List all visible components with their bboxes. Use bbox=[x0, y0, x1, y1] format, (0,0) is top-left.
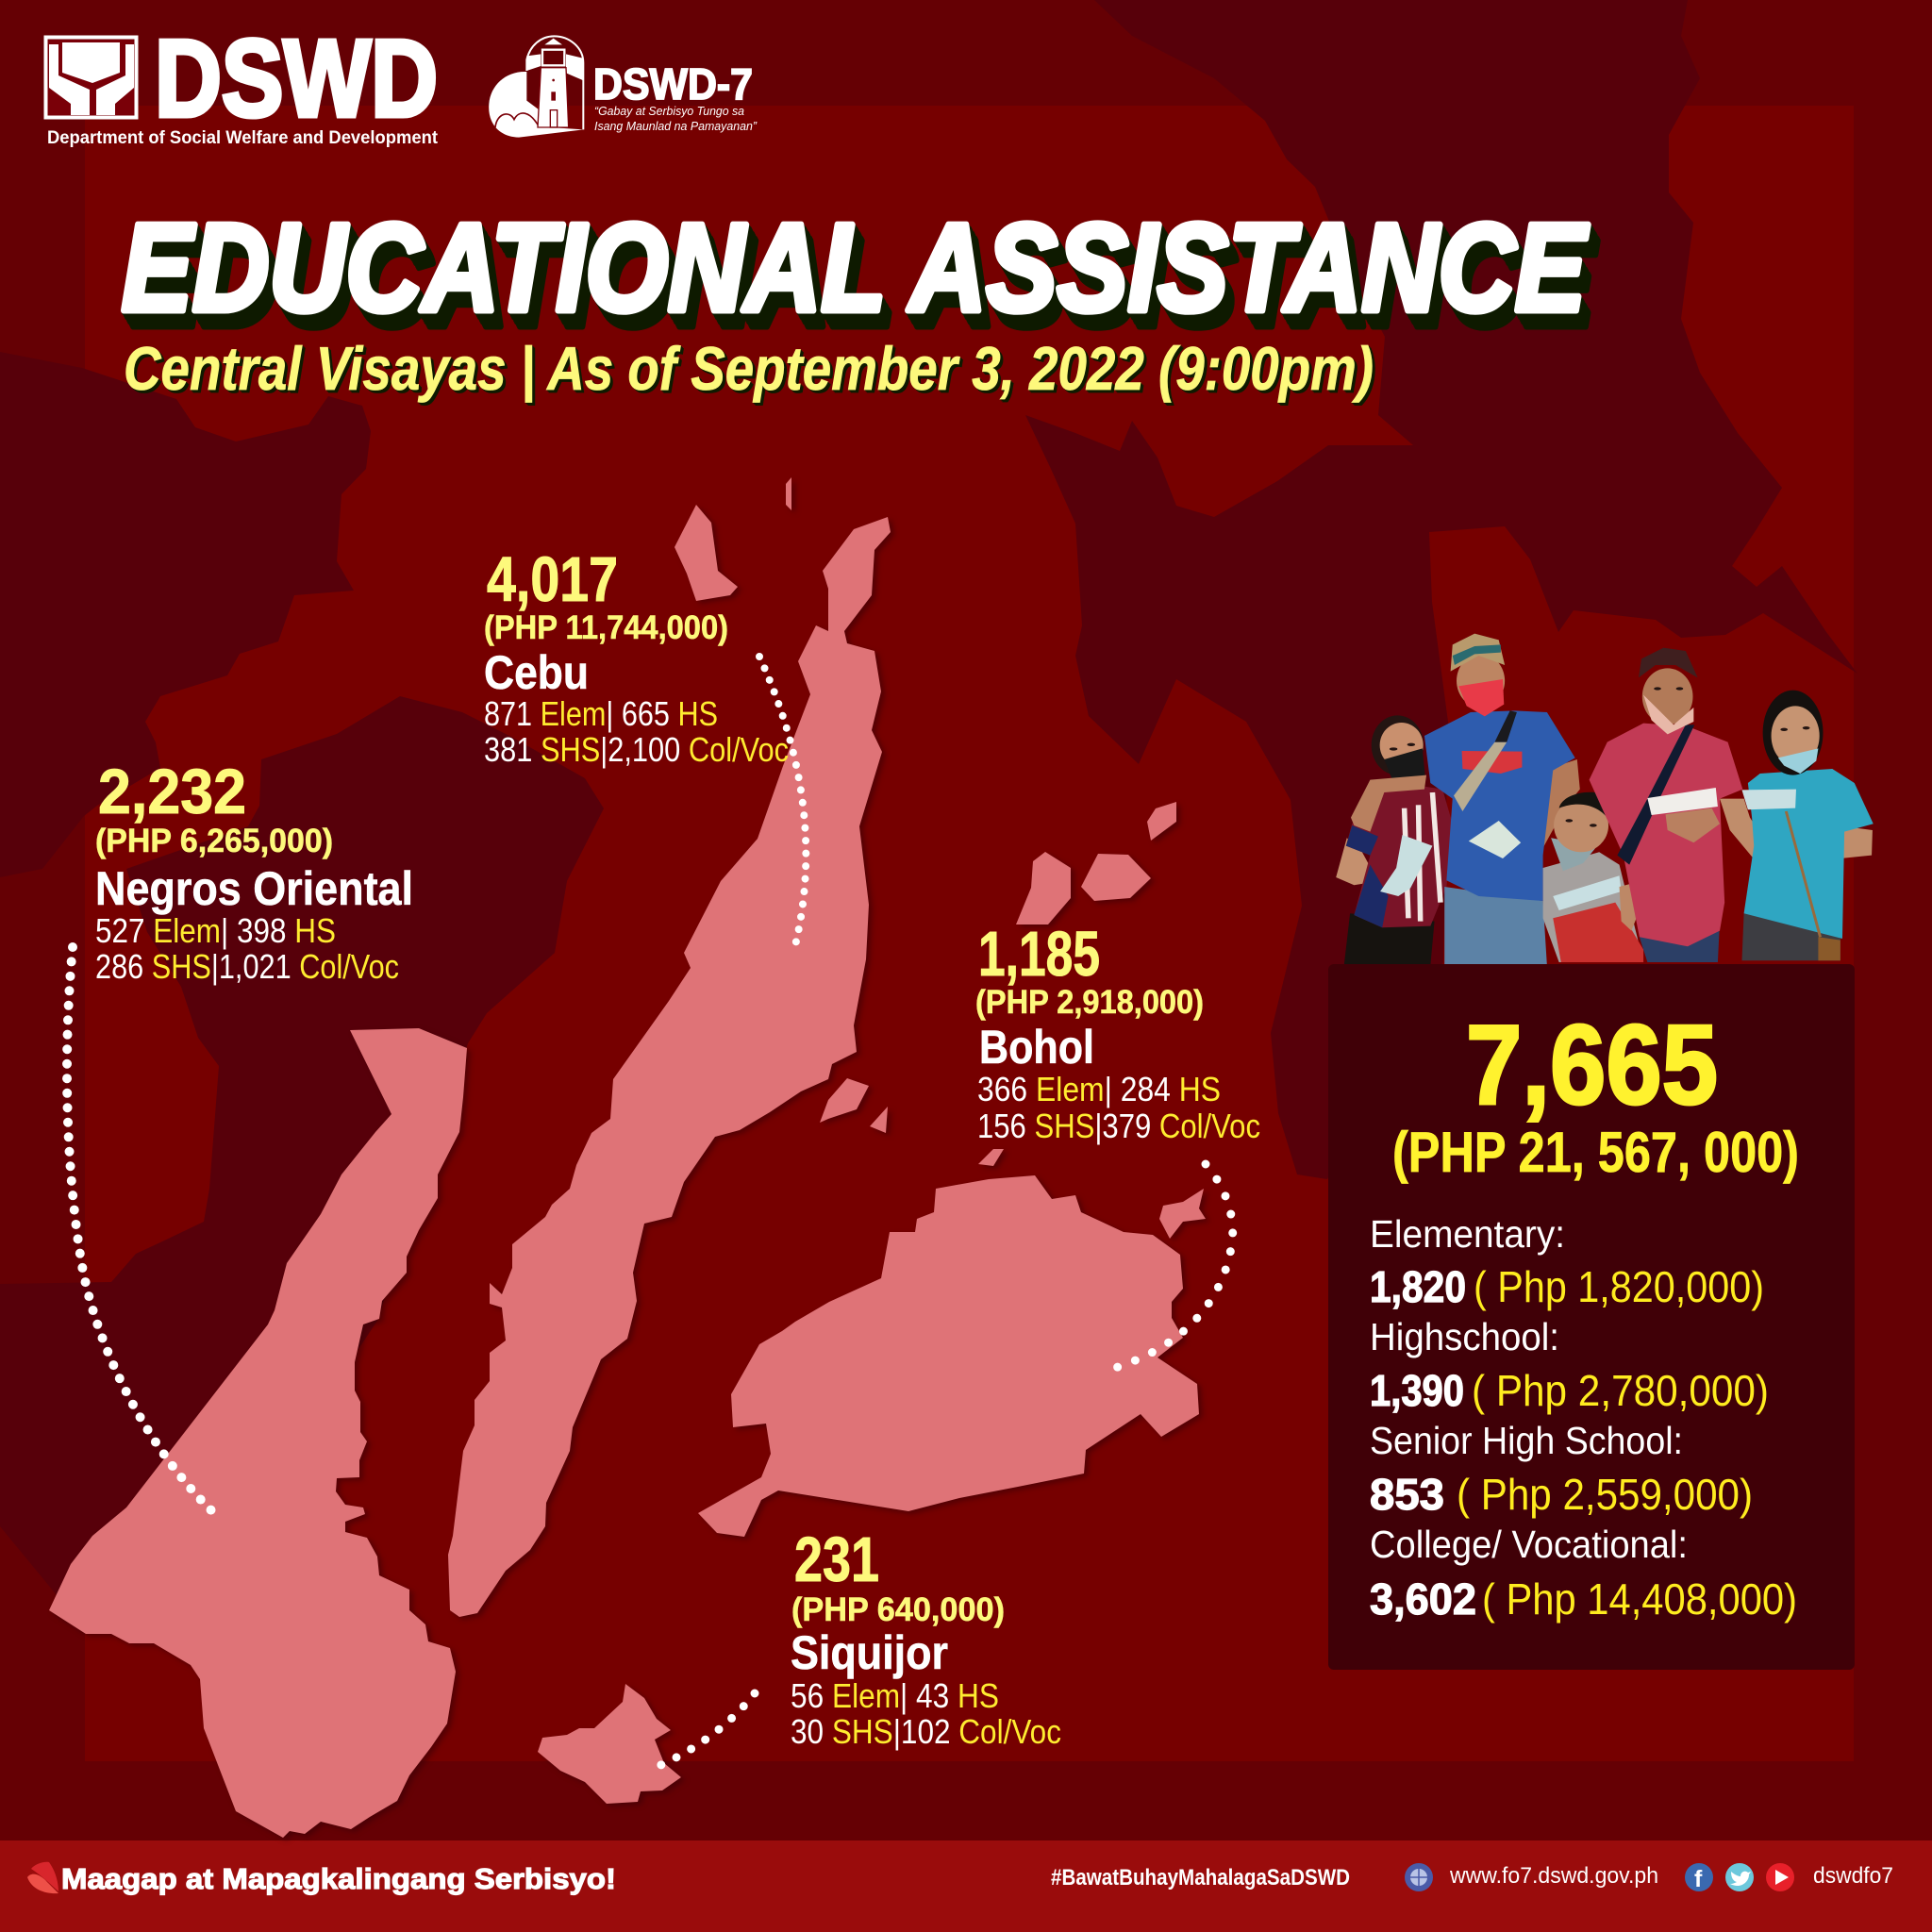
breakdown: highschool: ( Php 2,780,000) bbox=[1472, 1366, 1769, 1415]
label: Bohol: Bohol bbox=[979, 1021, 1094, 1074]
footer website: www.fo7.dswd.gov.ph bbox=[1449, 1863, 1658, 1889]
label: Bohol: 1,185 bbox=[978, 919, 1100, 990]
icon: facebook: f bbox=[1694, 1866, 1703, 1892]
subtitle: Central Visayas | As of September 3, 2022 (9:00pm) bbox=[124, 334, 1374, 403]
breakdown: senior high school bbox=[1370, 1419, 1753, 1519]
label: Negros Oriental: 286 SHS|1,021 Col/Voc bbox=[95, 947, 399, 986]
label: Siquijor: 56 Elem| 43 HS bbox=[791, 1676, 999, 1715]
breakdown: college vocational: ( Php 14,408,000) bbox=[1482, 1574, 1797, 1624]
person: man in pink shirt bbox=[1590, 648, 1742, 962]
island: Bantayan bbox=[675, 505, 738, 601]
person: girl in cyan shirt bbox=[1720, 691, 1874, 960]
island: Negros bbox=[49, 1028, 467, 1838]
label: Bohol: 366 Elem| 284 HS bbox=[977, 1070, 1221, 1108]
dotted leader: Cebu bbox=[759, 657, 806, 953]
person: man in blue shirt bbox=[1351, 634, 1580, 965]
island: Olango bbox=[820, 1078, 869, 1123]
label: Bohol: (PHP 2,918,000) bbox=[975, 984, 1204, 1021]
logo: DSWD-7 lighthouse bbox=[489, 36, 758, 138]
label: Siquijor bbox=[791, 1524, 1061, 1751]
label: Siquijor: (PHP 640,000) bbox=[791, 1591, 1005, 1628]
icon: footer leaf bbox=[27, 1862, 58, 1893]
label: Negros Oriental: Negros Oriental bbox=[95, 862, 413, 915]
total beneficiaries: 7,665 bbox=[1466, 1002, 1718, 1128]
person: boy bbox=[1543, 792, 1643, 962]
breakdown: elementary: Elementary: bbox=[1370, 1212, 1565, 1256]
island: small islet bbox=[870, 1107, 888, 1133]
logo: DSWD: DSWD bbox=[155, 17, 438, 140]
label: Cebu: Cebu bbox=[484, 646, 589, 699]
label: Cebu bbox=[484, 544, 789, 769]
icon: globe bbox=[1405, 1863, 1433, 1891]
dotted leader: Siquijor bbox=[657, 1693, 755, 1767]
title: EDUCATIONAL ASSISTANCE bbox=[122, 198, 1589, 337]
dotted leader: Negros Oriental bbox=[67, 947, 214, 1513]
label: Cebu: 4,017 bbox=[487, 544, 618, 615]
icon: lighthouse bbox=[489, 36, 583, 138]
logo: DSWD-7 lighthouse: Isang Maunlad na Pamayanan” bbox=[594, 119, 758, 133]
breakdown: highschool: 1,390 bbox=[1370, 1366, 1464, 1415]
island: Bohol bbox=[698, 1175, 1199, 1537]
breakdown: senior high school: ( Php 2,559,000) bbox=[1457, 1470, 1753, 1519]
breakdown: senior high school: 853 bbox=[1370, 1470, 1444, 1519]
breakdown: highschool: Highschool: bbox=[1370, 1315, 1559, 1358]
person: woman in striped shirt bbox=[1336, 715, 1453, 965]
breakdown: college vocational: 3,602 bbox=[1370, 1574, 1476, 1624]
island: Siquijor bbox=[538, 1684, 681, 1804]
label: Negros Oriental bbox=[95, 757, 413, 986]
logo: DSWD-7 lighthouse: DSWD-7 bbox=[593, 59, 753, 108]
island: Bohol north-east islet bbox=[1159, 1189, 1206, 1239]
map: Central Visayas islands bbox=[49, 477, 1206, 1838]
logo: DSWD-7 lighthouse: “Gabay at Serbisyo Tungo sa bbox=[594, 104, 744, 118]
icon: youtube bbox=[1766, 1863, 1794, 1891]
label: Bohol bbox=[975, 919, 1260, 1145]
island: Camotes west bbox=[1016, 852, 1071, 924]
breakdown: elementary: ( Php 1,820,000) bbox=[1474, 1262, 1764, 1311]
label: Cebu: 871 Elem| 665 HS bbox=[484, 694, 718, 733]
breakdown: elementary: 1,820 bbox=[1370, 1262, 1466, 1311]
footer hashtag: #BawatBuhayMahalagaSaDSWD bbox=[1051, 1865, 1350, 1890]
label: Cebu: 381 SHS|2,100 Col/Voc bbox=[484, 730, 789, 769]
panel: totals bbox=[1328, 964, 1855, 1670]
label: Siquijor: Siquijor bbox=[791, 1626, 948, 1679]
breakdown: college vocational: College/ Vocational: bbox=[1370, 1523, 1688, 1566]
label: Negros Oriental: (PHP 6,265,000) bbox=[95, 823, 333, 859]
breakdown: elementary bbox=[1370, 1212, 1764, 1311]
label: Bohol: 156 SHS|379 Col/Voc bbox=[977, 1107, 1260, 1145]
footer slogan: Maagap at Mapagkalingang Serbisyo! bbox=[61, 1862, 616, 1895]
island: Bohol north islet bbox=[978, 1149, 1004, 1166]
island: Cebu bbox=[448, 517, 891, 1617]
label: Cebu: (PHP 11,744,000) bbox=[484, 609, 728, 646]
label: Negros Oriental: 2,232 bbox=[98, 757, 246, 827]
icon: twitter bbox=[1725, 1863, 1754, 1891]
breakdown: highschool bbox=[1370, 1315, 1769, 1415]
total amount: (PHP 21, 567, 000) bbox=[1392, 1121, 1799, 1184]
icon: facebook bbox=[1685, 1863, 1713, 1892]
label: Negros Oriental: 527 Elem| 398 HS bbox=[95, 911, 336, 950]
label: Siquijor: 30 SHS|102 Col/Voc bbox=[791, 1712, 1061, 1751]
dotted leader: Bohol bbox=[1115, 1164, 1233, 1368]
island: Camotes east bbox=[1081, 854, 1151, 901]
logo: DSWD: Department of Social Welfare and Development bbox=[47, 128, 439, 148]
breakdown: senior high school: Senior High School: bbox=[1370, 1419, 1683, 1462]
photo: beneficiary family bbox=[1336, 634, 1874, 965]
breakdown: college vocational bbox=[1370, 1523, 1797, 1624]
island: Camotes north bbox=[1147, 802, 1176, 841]
footer handle: dswdfo7 bbox=[1813, 1863, 1893, 1889]
logo: DSWD bbox=[45, 17, 439, 148]
island: tiny north islet bbox=[786, 477, 791, 510]
label: Siquijor: 231 bbox=[794, 1524, 879, 1595]
footer bar bbox=[0, 1840, 1932, 1932]
